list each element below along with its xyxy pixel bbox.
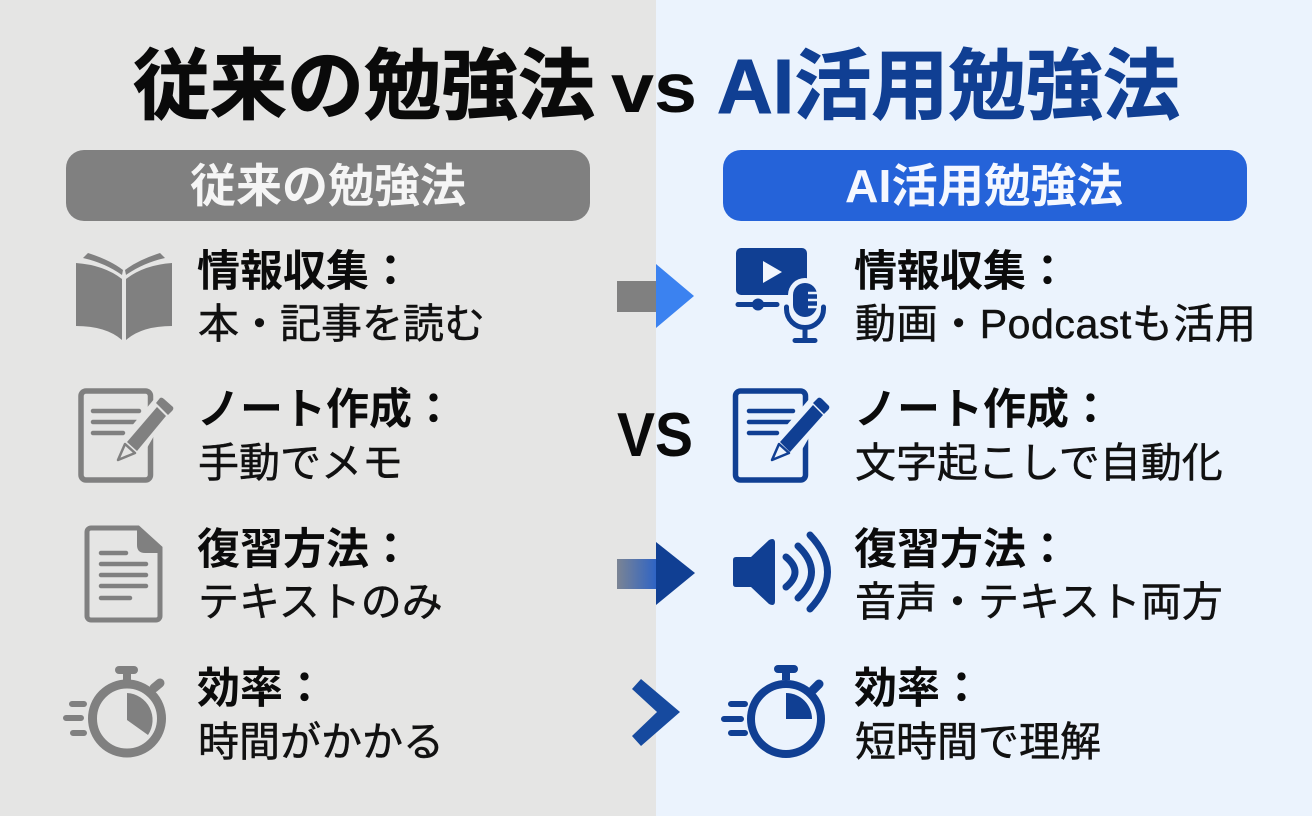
text: right row 1: 動画・Podcastも活用 [855, 301, 1256, 347]
text: left row 4 [197, 665, 444, 765]
icon: open book [76, 253, 172, 340]
heading: right column: AI活用勉強法 [845, 160, 1123, 212]
text: left row 2: 手動でメモ [198, 440, 403, 486]
text: left row 1: 本・記事を読む [198, 301, 485, 347]
title: AI活用勉強法 [717, 44, 1180, 130]
text: left row 2: ノート作成： [197, 386, 455, 434]
vs label: VS [617, 401, 693, 470]
icon: stopwatch grey [66, 670, 162, 753]
text: right row 1: 情報収集： [854, 248, 1069, 296]
icon: note and pencil grey [81, 391, 176, 480]
title: 従来の勉強法 [133, 44, 595, 130]
text: left row 4: 効率： [197, 665, 326, 713]
title: vs [611, 49, 697, 127]
arrow: row 3 [617, 542, 695, 605]
panel: right background [656, 0, 1312, 816]
text: left row 3 [197, 526, 443, 625]
icon: speaker [733, 535, 828, 609]
text: right row 2 [854, 386, 1223, 486]
text: left row 2 [197, 386, 455, 486]
text: right row 2: 文字起こしで自動化 [855, 440, 1223, 486]
heading: left column: 従来の勉強法 [190, 160, 466, 212]
text: left row 4: 時間がかかる [198, 719, 444, 765]
text: left row 1 [197, 248, 485, 347]
text: right row 4: 短時間で理解 [855, 719, 1101, 765]
text: right row 4: 効率： [854, 665, 983, 713]
arrow: row 1 [617, 264, 694, 328]
text: right row 1 [854, 248, 1256, 347]
icon: stopwatch blue [724, 669, 821, 754]
text: right row 3: 音声・テキスト両方 [855, 579, 1223, 625]
icon: video and microphone [736, 248, 824, 340]
icon: document [87, 527, 162, 620]
heading: right column [723, 150, 1247, 221]
heading: left column [66, 150, 590, 221]
text: left row 3: 復習方法： [197, 526, 412, 574]
text: right row 3 [854, 526, 1223, 625]
title [133, 44, 1180, 130]
text: right row 2: ノート作成： [854, 386, 1112, 434]
icon: note and pencil blue [736, 391, 832, 480]
text: right row 4 [854, 665, 1101, 765]
text: left row 1: 情報収集： [197, 248, 412, 296]
arrow: row 4 chevron [632, 679, 680, 746]
text: left row 3: テキストのみ [198, 579, 443, 625]
panel: left background [0, 0, 656, 816]
text: right row 3: 復習方法： [854, 526, 1069, 574]
